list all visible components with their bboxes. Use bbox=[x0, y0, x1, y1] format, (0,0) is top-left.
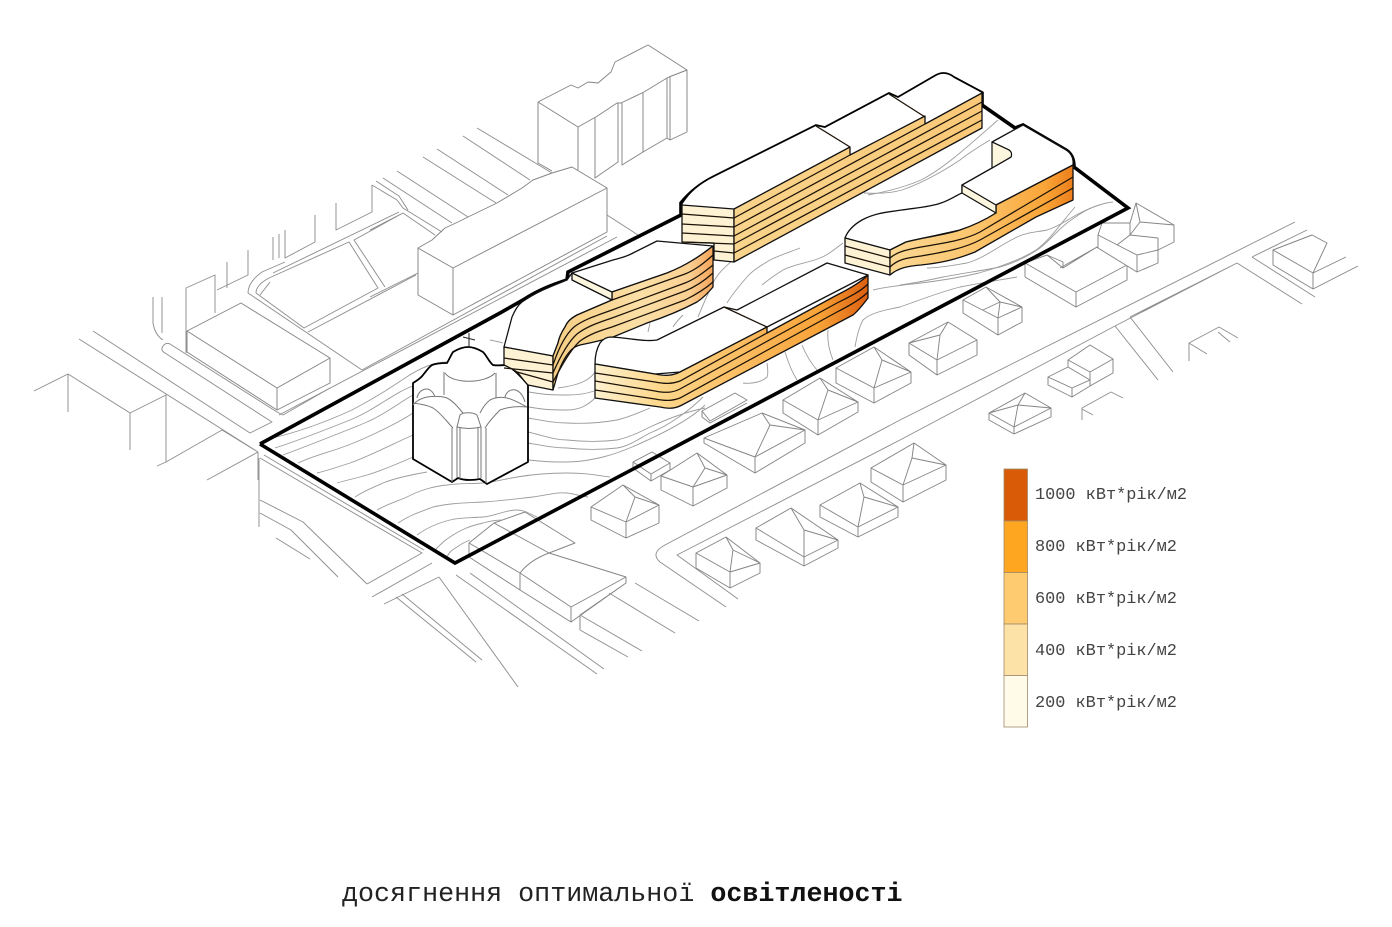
building C: front centre block bbox=[595, 263, 868, 408]
roof bbox=[845, 125, 1073, 250]
road strip and left corner building bbox=[34, 331, 330, 480]
house row: along the site edge bbox=[591, 485, 659, 538]
building B: curved block on the left bbox=[504, 241, 713, 390]
floor lines bbox=[504, 255, 713, 382]
roads and yard lines: upper left bbox=[248, 128, 638, 415]
legend labels: 400 кВт*рік/м2 bbox=[1035, 642, 1177, 661]
building: low block at the left bbox=[187, 303, 330, 410]
left facade bbox=[504, 347, 553, 390]
curved facade bbox=[890, 165, 1073, 275]
church cross bbox=[463, 333, 475, 348]
legend colour bar bbox=[1004, 469, 1028, 727]
house row: lower street bbox=[696, 537, 760, 588]
roof divisions bbox=[816, 94, 925, 147]
roof bbox=[504, 241, 713, 356]
stepped roof block bbox=[962, 185, 996, 213]
building: long block beside the site bbox=[418, 167, 607, 315]
roads: long street on the right bbox=[656, 222, 1315, 607]
legend: energy scale bbox=[1004, 469, 1187, 727]
legend labels: 600 кВт*рік/м2 bbox=[1035, 590, 1177, 609]
roads: lower left and bottom bbox=[259, 455, 604, 687]
long facade bbox=[734, 93, 982, 262]
left facade bbox=[845, 238, 890, 275]
building D: curved block on the right bbox=[845, 125, 1073, 275]
legend labels: 1000 кВт*рік/м2 bbox=[1035, 486, 1187, 505]
context: surrounding city blocks and roads bbox=[34, 45, 1358, 687]
legend labels: 200 кВт*рік/м2 bbox=[1035, 694, 1177, 713]
houses: bottom complex bbox=[469, 512, 626, 630]
church bbox=[413, 333, 528, 484]
church inner lines bbox=[413, 372, 527, 483]
floor lines bbox=[845, 177, 1073, 267]
roof bbox=[595, 263, 868, 374]
bottom street lines bbox=[580, 583, 699, 657]
legend labels bbox=[1035, 486, 1187, 713]
site boundary: thick black outline bbox=[260, 74, 1128, 563]
building: stepped tower block at the back bbox=[538, 45, 687, 178]
facade bbox=[595, 275, 868, 408]
notch wall bbox=[992, 142, 1012, 168]
building A: long block at the top bbox=[682, 74, 982, 262]
legend labels: 800 кВт*рік/м2 bbox=[1035, 538, 1177, 557]
left facade bbox=[682, 205, 734, 262]
floor lines bbox=[682, 102, 982, 253]
curved facade bbox=[553, 246, 713, 390]
title: досягнення оптимальної освітленості bbox=[342, 880, 903, 910]
house: far right bbox=[1273, 235, 1358, 289]
roof division bbox=[724, 307, 767, 327]
church silhouette bbox=[413, 347, 528, 484]
roof bbox=[682, 74, 982, 209]
roof end block bbox=[572, 273, 612, 300]
contour lines of the terrain bbox=[268, 120, 1113, 557]
small pavilions at the site edge bbox=[633, 452, 670, 481]
floor lines bbox=[595, 284, 868, 400]
